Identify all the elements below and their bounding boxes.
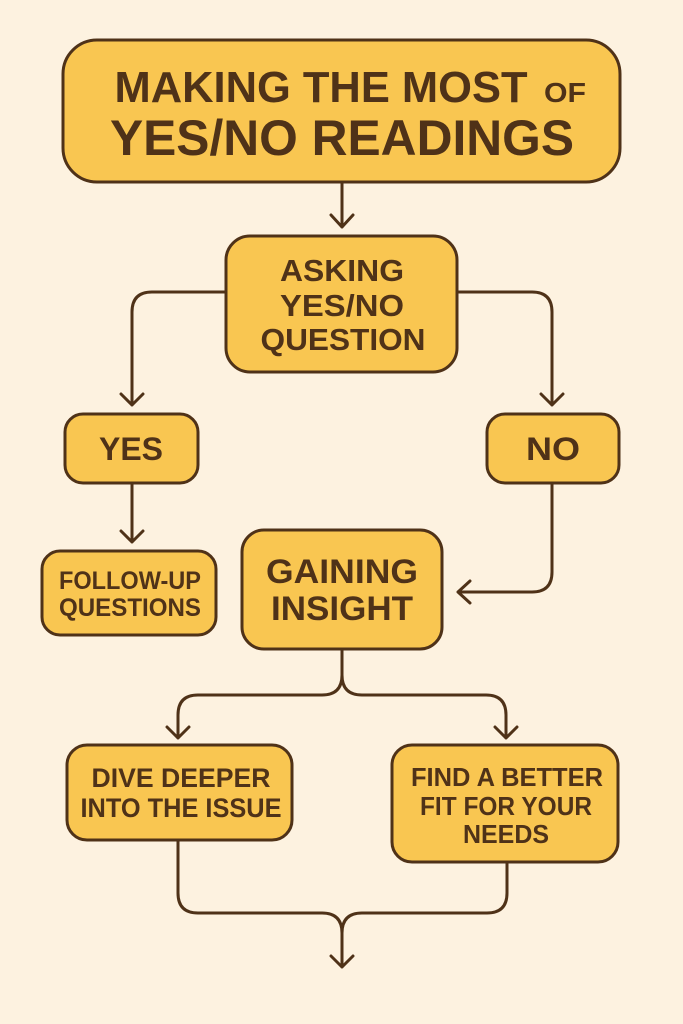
box: follow-up questions: QUESTIONS [59, 594, 201, 622]
box: follow-up questions [42, 551, 216, 635]
box: find a better fit [392, 745, 618, 862]
arrow: title to question [331, 183, 353, 227]
box: no [487, 414, 619, 483]
box: follow-up questions: FOLLOW-UP [59, 567, 201, 595]
box: find a better fit: FIND A BETTER [411, 762, 603, 792]
box: no: NO [526, 431, 580, 467]
title: OF [544, 77, 586, 108]
arrow: question to no [457, 292, 563, 405]
title [63, 40, 620, 182]
box: gaining insight [242, 530, 442, 649]
title: YES/NO READINGS [110, 110, 574, 166]
box: gaining insight: INSIGHT [271, 590, 413, 628]
arrow: merge to bottom [178, 840, 507, 967]
box: yes [65, 414, 198, 483]
box: asking yes/no question: YES/NO [280, 288, 404, 323]
box: find a better fit: NEEDS [463, 819, 549, 849]
title: MAKING THE MOST [114, 63, 528, 112]
box: asking yes/no question: ASKING [280, 253, 404, 288]
arrow: question to yes [121, 292, 226, 405]
box: yes: YES [99, 431, 163, 467]
box: asking yes/no question: QUESTION [260, 322, 426, 357]
arrow: no to gaining insight [458, 483, 552, 603]
box: asking yes/no question [226, 236, 457, 372]
box: dive deeper [67, 745, 292, 840]
box: find a better fit: FIT FOR YOUR [420, 791, 592, 821]
box: gaining insight: GAINING [266, 553, 418, 591]
arrow: insight split [167, 649, 517, 738]
box: dive deeper: DIVE DEEPER [92, 763, 270, 793]
arrow: yes to follow-up [121, 483, 143, 542]
box: dive deeper: INTO THE ISSUE [80, 793, 282, 823]
